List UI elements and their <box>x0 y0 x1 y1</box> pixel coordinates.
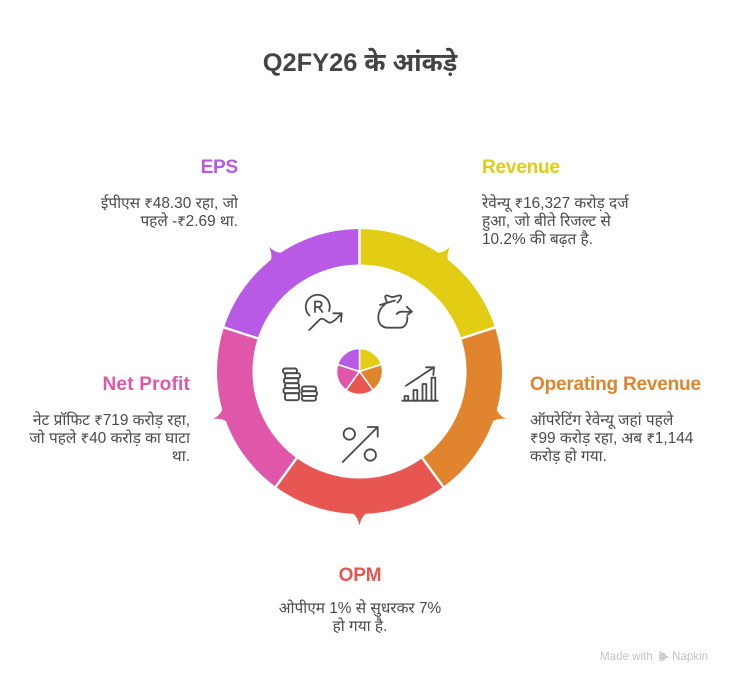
heading: EPS: EPS <box>201 157 238 178</box>
text: Revenue description: 10.2% की बढ़त है. <box>482 231 593 248</box>
text: OPM description: ओपीएम 1% से सुधरकर 7% <box>279 600 441 617</box>
text: EPS description: पहले -₹2.69 था. <box>140 213 238 230</box>
text: Revenue description: रेवेन्यू ₹16,327 करोड़ दर्ज <box>482 195 629 212</box>
heading: Net Profit: Net Profit <box>102 374 190 395</box>
icon: rupee growth <box>306 295 342 330</box>
heading: Operating Revenue: Operating Revenue <box>530 374 701 395</box>
title: Q2FY26 के आंकड़े <box>263 49 457 77</box>
ring segment: Revenue <box>360 229 495 338</box>
heading: Revenue: Revenue <box>482 157 560 178</box>
icon: coin stacks <box>283 368 317 401</box>
watermark: Made with Napkin: Made with <box>600 650 653 663</box>
panel: OPM <box>279 565 441 635</box>
text: Revenue description <box>482 194 629 248</box>
text: Net Profit description: जो पहले ₹40 करोड़ का घाटा <box>29 430 190 447</box>
watermark: Made with Napkin <box>600 650 708 663</box>
text: EPS description: ईपीएस ₹48.30 रहा, जो <box>101 195 238 212</box>
text: Net Profit description: नेट प्रॉफिट ₹719 करोड़ रहा, <box>33 412 190 429</box>
text: Net Profit description <box>29 411 190 465</box>
text: EPS description <box>100 194 238 230</box>
icon: percent arrow <box>343 427 378 462</box>
text: OPM description: हो गया है. <box>333 618 387 635</box>
center pie chart <box>336 348 383 394</box>
ring segment: Net Profit <box>211 328 297 487</box>
watermark: Made with Napkin: Napkin <box>672 650 708 663</box>
icon: napkin logo <box>658 652 668 662</box>
text: Net Profit description: था. <box>172 448 190 465</box>
panel: EPS <box>100 157 238 230</box>
text: Operating Revenue description: ₹99 करोड़ रहा, अब ₹1,144 <box>530 430 693 447</box>
text: Operating Revenue description <box>530 411 693 465</box>
panel: Net Profit <box>29 374 190 465</box>
ring segment: Operating Revenue <box>422 328 508 487</box>
icon: rising bar chart <box>402 367 438 401</box>
heading: OPM: OPM <box>339 565 381 586</box>
text: Revenue description: हुआ, जो बीते रिजल्ट से <box>482 213 611 230</box>
panel: Operating Revenue <box>530 374 701 465</box>
ring segment: OPM <box>276 458 443 526</box>
ring segment: EPS <box>224 229 360 338</box>
text: Operating Revenue description: करोड़ हो गया. <box>530 448 607 465</box>
icon: money bag with arrow <box>378 295 412 328</box>
text: OPM description <box>279 599 441 635</box>
panel: Revenue <box>482 157 629 248</box>
text: Operating Revenue description: ऑपरेटिंग रेवेन्यू जहां पहले <box>530 412 673 429</box>
